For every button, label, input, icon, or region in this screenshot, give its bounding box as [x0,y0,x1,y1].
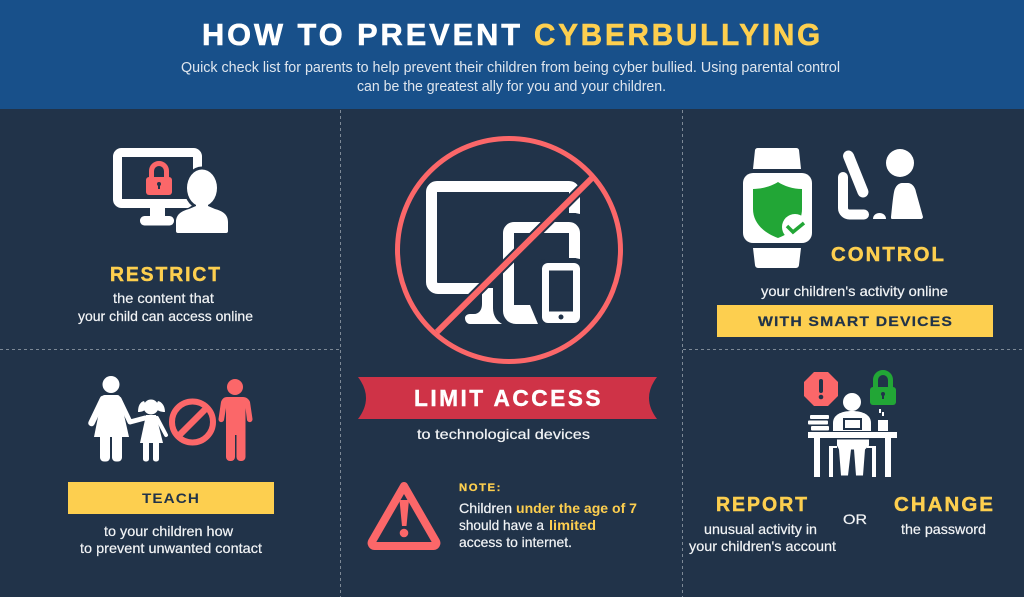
text: teach body [80,523,262,556]
panel: restrict [78,152,253,324]
note: should have a [459,517,544,533]
icon: monitor with lock and user [118,152,231,238]
label bar: teach: TEACH [142,490,200,506]
text: teach body: to your children how [104,523,234,539]
text: restrict body: your child can access online [78,308,253,324]
icon: devices prohibited [398,138,620,362]
text: report body: your children's account [689,538,836,554]
text: teach body: to prevent unwanted contact [80,540,262,556]
subtitle: Quick check list for parents to help prevent their children from being cyber bullied. Using parental control [181,60,840,76]
note: under the age of 7 [516,500,637,516]
text: change body: the password [901,521,986,537]
label bar: with smart devices: WITH SMART DEVICES [758,313,953,329]
text: restrict body: the content that [113,290,214,306]
panel: limit access [358,138,657,550]
icon: person at desk with alert and lock [804,372,897,477]
heading: change: CHANGE [894,494,995,516]
icon: warning triangle [372,486,436,546]
title: HOW TO PREVENT [202,17,523,52]
text: report body: unusual activity in [704,521,817,537]
icon: family and stranger prohibited [92,376,253,462]
subtitle: can be the greatest ally for you and your children. [357,79,666,95]
note: access to internet. [459,534,572,550]
text: control body: your children's activity online [761,283,948,299]
note: Children [459,500,512,516]
heading: restrict: RESTRICT [110,264,222,286]
panel: control [717,148,993,337]
note: limited [549,517,596,533]
text: limit access body: to technological devices [417,426,590,442]
note: NOTE: [459,482,502,494]
text: restrict body [78,290,253,324]
title [202,17,823,52]
title: CYBERBULLYING [534,17,823,52]
label bar: teach [68,482,274,514]
label bar: with smart devices [717,305,993,337]
heading: control: CONTROL [831,244,946,266]
subtitle [181,60,840,95]
panel: teach [68,376,274,556]
icon: smart watch with shield [743,148,812,268]
panel: report or change [689,372,995,554]
icon: chair and person [843,149,923,219]
heading: report: REPORT [716,494,809,516]
ribbon: limit access [358,377,657,419]
text: report body [689,521,836,554]
header banner [0,0,1024,109]
ribbon: limit access: LIMIT ACCESS [414,385,603,411]
text: or: OR [843,511,867,527]
note [459,482,637,550]
